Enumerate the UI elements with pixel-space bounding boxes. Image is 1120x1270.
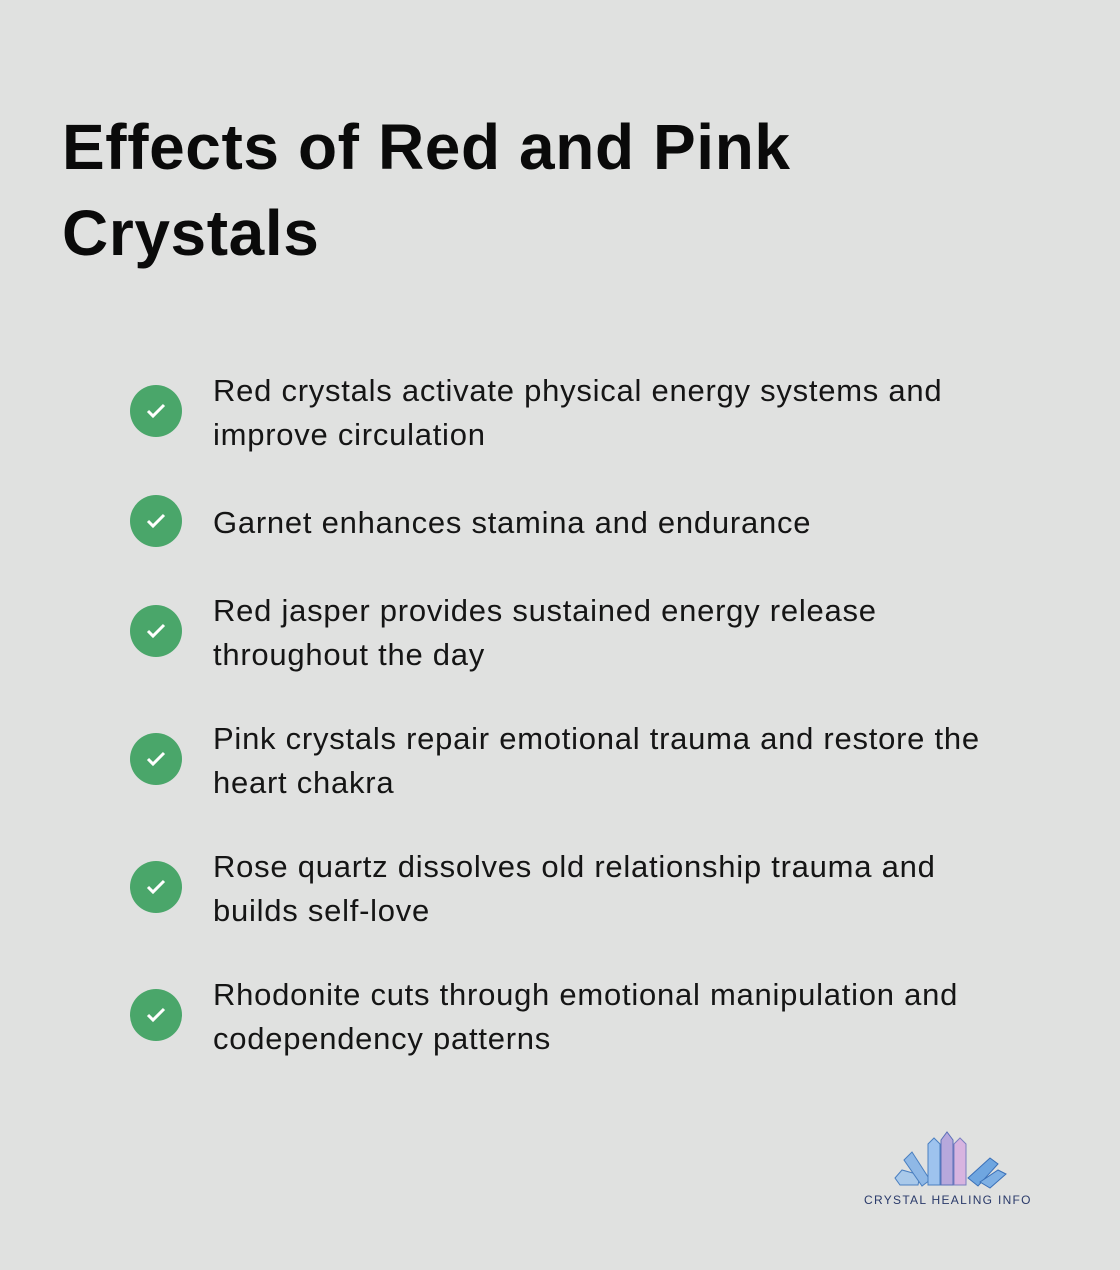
- logo text: CRYSTAL HEALING INFO: [864, 1193, 1032, 1207]
- item 6: Rhodonite cuts through emotional manipulation and: [213, 977, 958, 1012]
- item 4: Pink crystals repair emotional trauma and restore the: [213, 721, 980, 756]
- title: [62, 111, 791, 269]
- item 1: improve circulation: [213, 417, 486, 452]
- item 6: codependency patterns: [213, 1021, 551, 1056]
- item 2: Garnet enhances stamina and endurance: [213, 505, 811, 540]
- item 6: [130, 977, 958, 1056]
- item 4: [130, 721, 980, 800]
- item 3: throughout the day: [213, 637, 485, 672]
- title: Effects of Red and Pink: [62, 111, 791, 183]
- item 5: [130, 849, 936, 928]
- item 4: heart chakra: [213, 765, 394, 800]
- title: Crystals: [62, 197, 319, 269]
- logo: [864, 1131, 1032, 1207]
- item 3: [130, 593, 877, 672]
- item 1: Red crystals activate physical energy systems and: [213, 373, 942, 408]
- item 1: [130, 373, 942, 452]
- item 5: builds self-love: [213, 893, 430, 928]
- item 3: Red jasper provides sustained energy release: [213, 593, 877, 628]
- item 2: [130, 495, 811, 547]
- icon: crystals: [894, 1131, 1007, 1189]
- item 5: Rose quartz dissolves old relationship trauma and: [213, 849, 936, 884]
